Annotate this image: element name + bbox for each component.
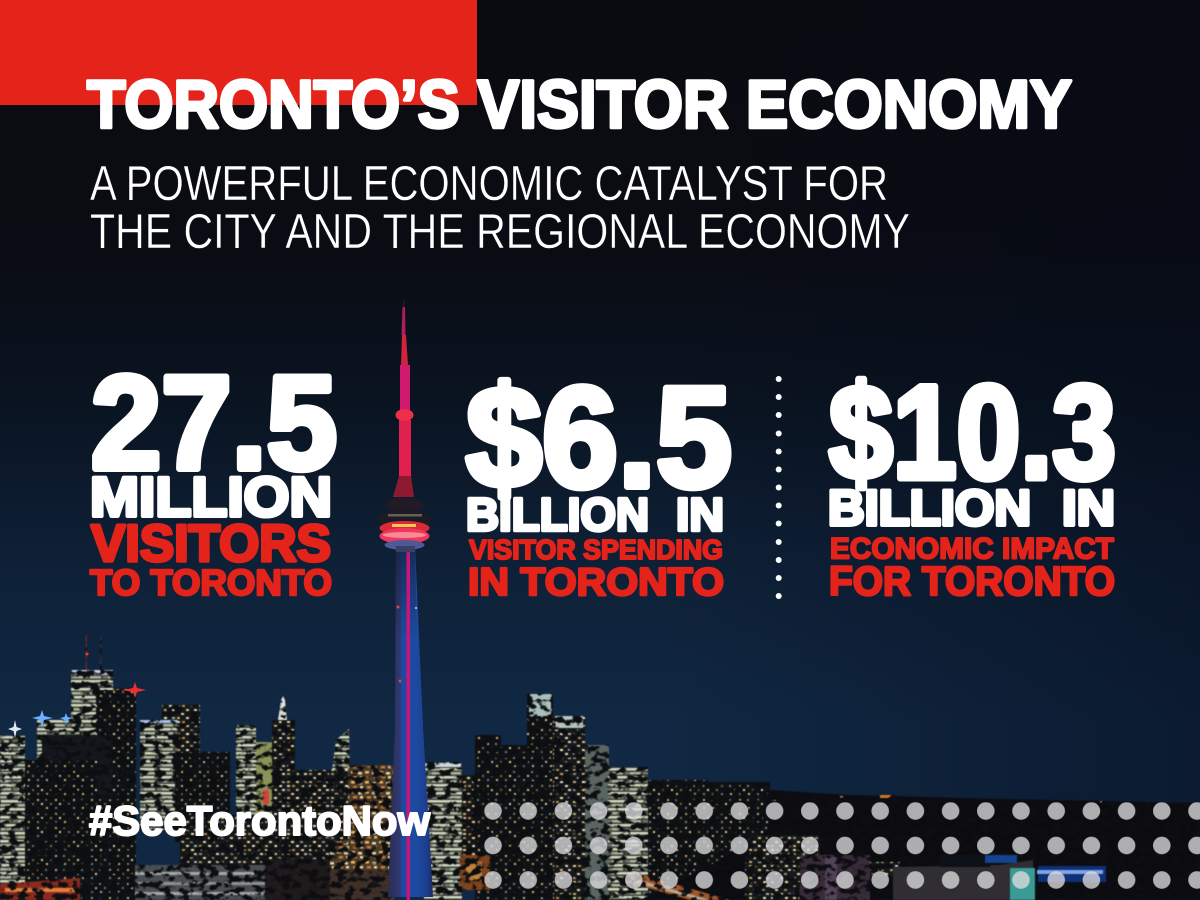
stat: 27.5 million visitors	[90, 350, 337, 603]
stat: $6.5 billion visitor spending: IN	[676, 488, 724, 540]
dark right ground and horizon	[640, 790, 1200, 900]
hashtag: #SeeTorontoNow	[89, 797, 430, 844]
waterfront buildings	[620, 835, 900, 900]
city skyline photo area	[0, 635, 1200, 900]
stat: 27.5 million visitors: VISITORS	[91, 515, 331, 573]
stat: $10.3 billion economic impact: FOR TORONTO	[829, 558, 1115, 604]
stat: 27.5 million visitors: 27.5	[91, 350, 337, 498]
stat: $6.5 billion visitor spending: $6.5	[466, 358, 732, 518]
CN Tower	[378, 300, 433, 900]
tower shaft	[388, 540, 433, 900]
subtitle: THE CITY AND THE REGIONAL ECONOMY	[90, 205, 910, 259]
stat: $10.3 billion economic impact: IN	[1062, 480, 1115, 536]
stat: $10.3 billion economic impact	[828, 359, 1116, 604]
stat: $10.3 billion economic impact: ECONOMIC IMPACT	[830, 532, 1114, 566]
right skyline buildings	[424, 694, 770, 900]
stat: $6.5 billion visitor spending: BILLION	[466, 488, 649, 540]
subtitle: A POWERFUL ECONOMIC CATALYST FOR	[90, 157, 888, 211]
stat: $10.3 billion economic impact: BILLION	[828, 480, 1031, 536]
title: TORONTO’S VISITOR ECONOMY	[87, 66, 1072, 142]
rotunda and blue sign	[893, 855, 1106, 900]
tower mast and spire	[393, 300, 414, 497]
dot grid	[484, 802, 1200, 889]
stat: 27.5 million visitors: TO TORONTO	[90, 562, 332, 603]
stat: $10.3 billion economic impact: $10.3	[829, 359, 1116, 507]
stat: 27.5 million visitors: MILLION	[90, 465, 332, 528]
left skyline buildings	[0, 635, 394, 900]
stat: $6.5 billion visitor spending	[466, 358, 732, 604]
lower left low buildings and arena	[0, 840, 390, 900]
city light flares	[8, 652, 146, 738]
dotted divider	[776, 376, 782, 599]
red corner block	[0, 0, 477, 105]
stat: $6.5 billion visitor spending: IN TORONTO	[468, 561, 724, 604]
tower observation pod	[378, 498, 432, 552]
stat: $6.5 billion visitor spending: VISITOR SPENDING	[469, 534, 723, 565]
subtitle	[90, 157, 910, 259]
